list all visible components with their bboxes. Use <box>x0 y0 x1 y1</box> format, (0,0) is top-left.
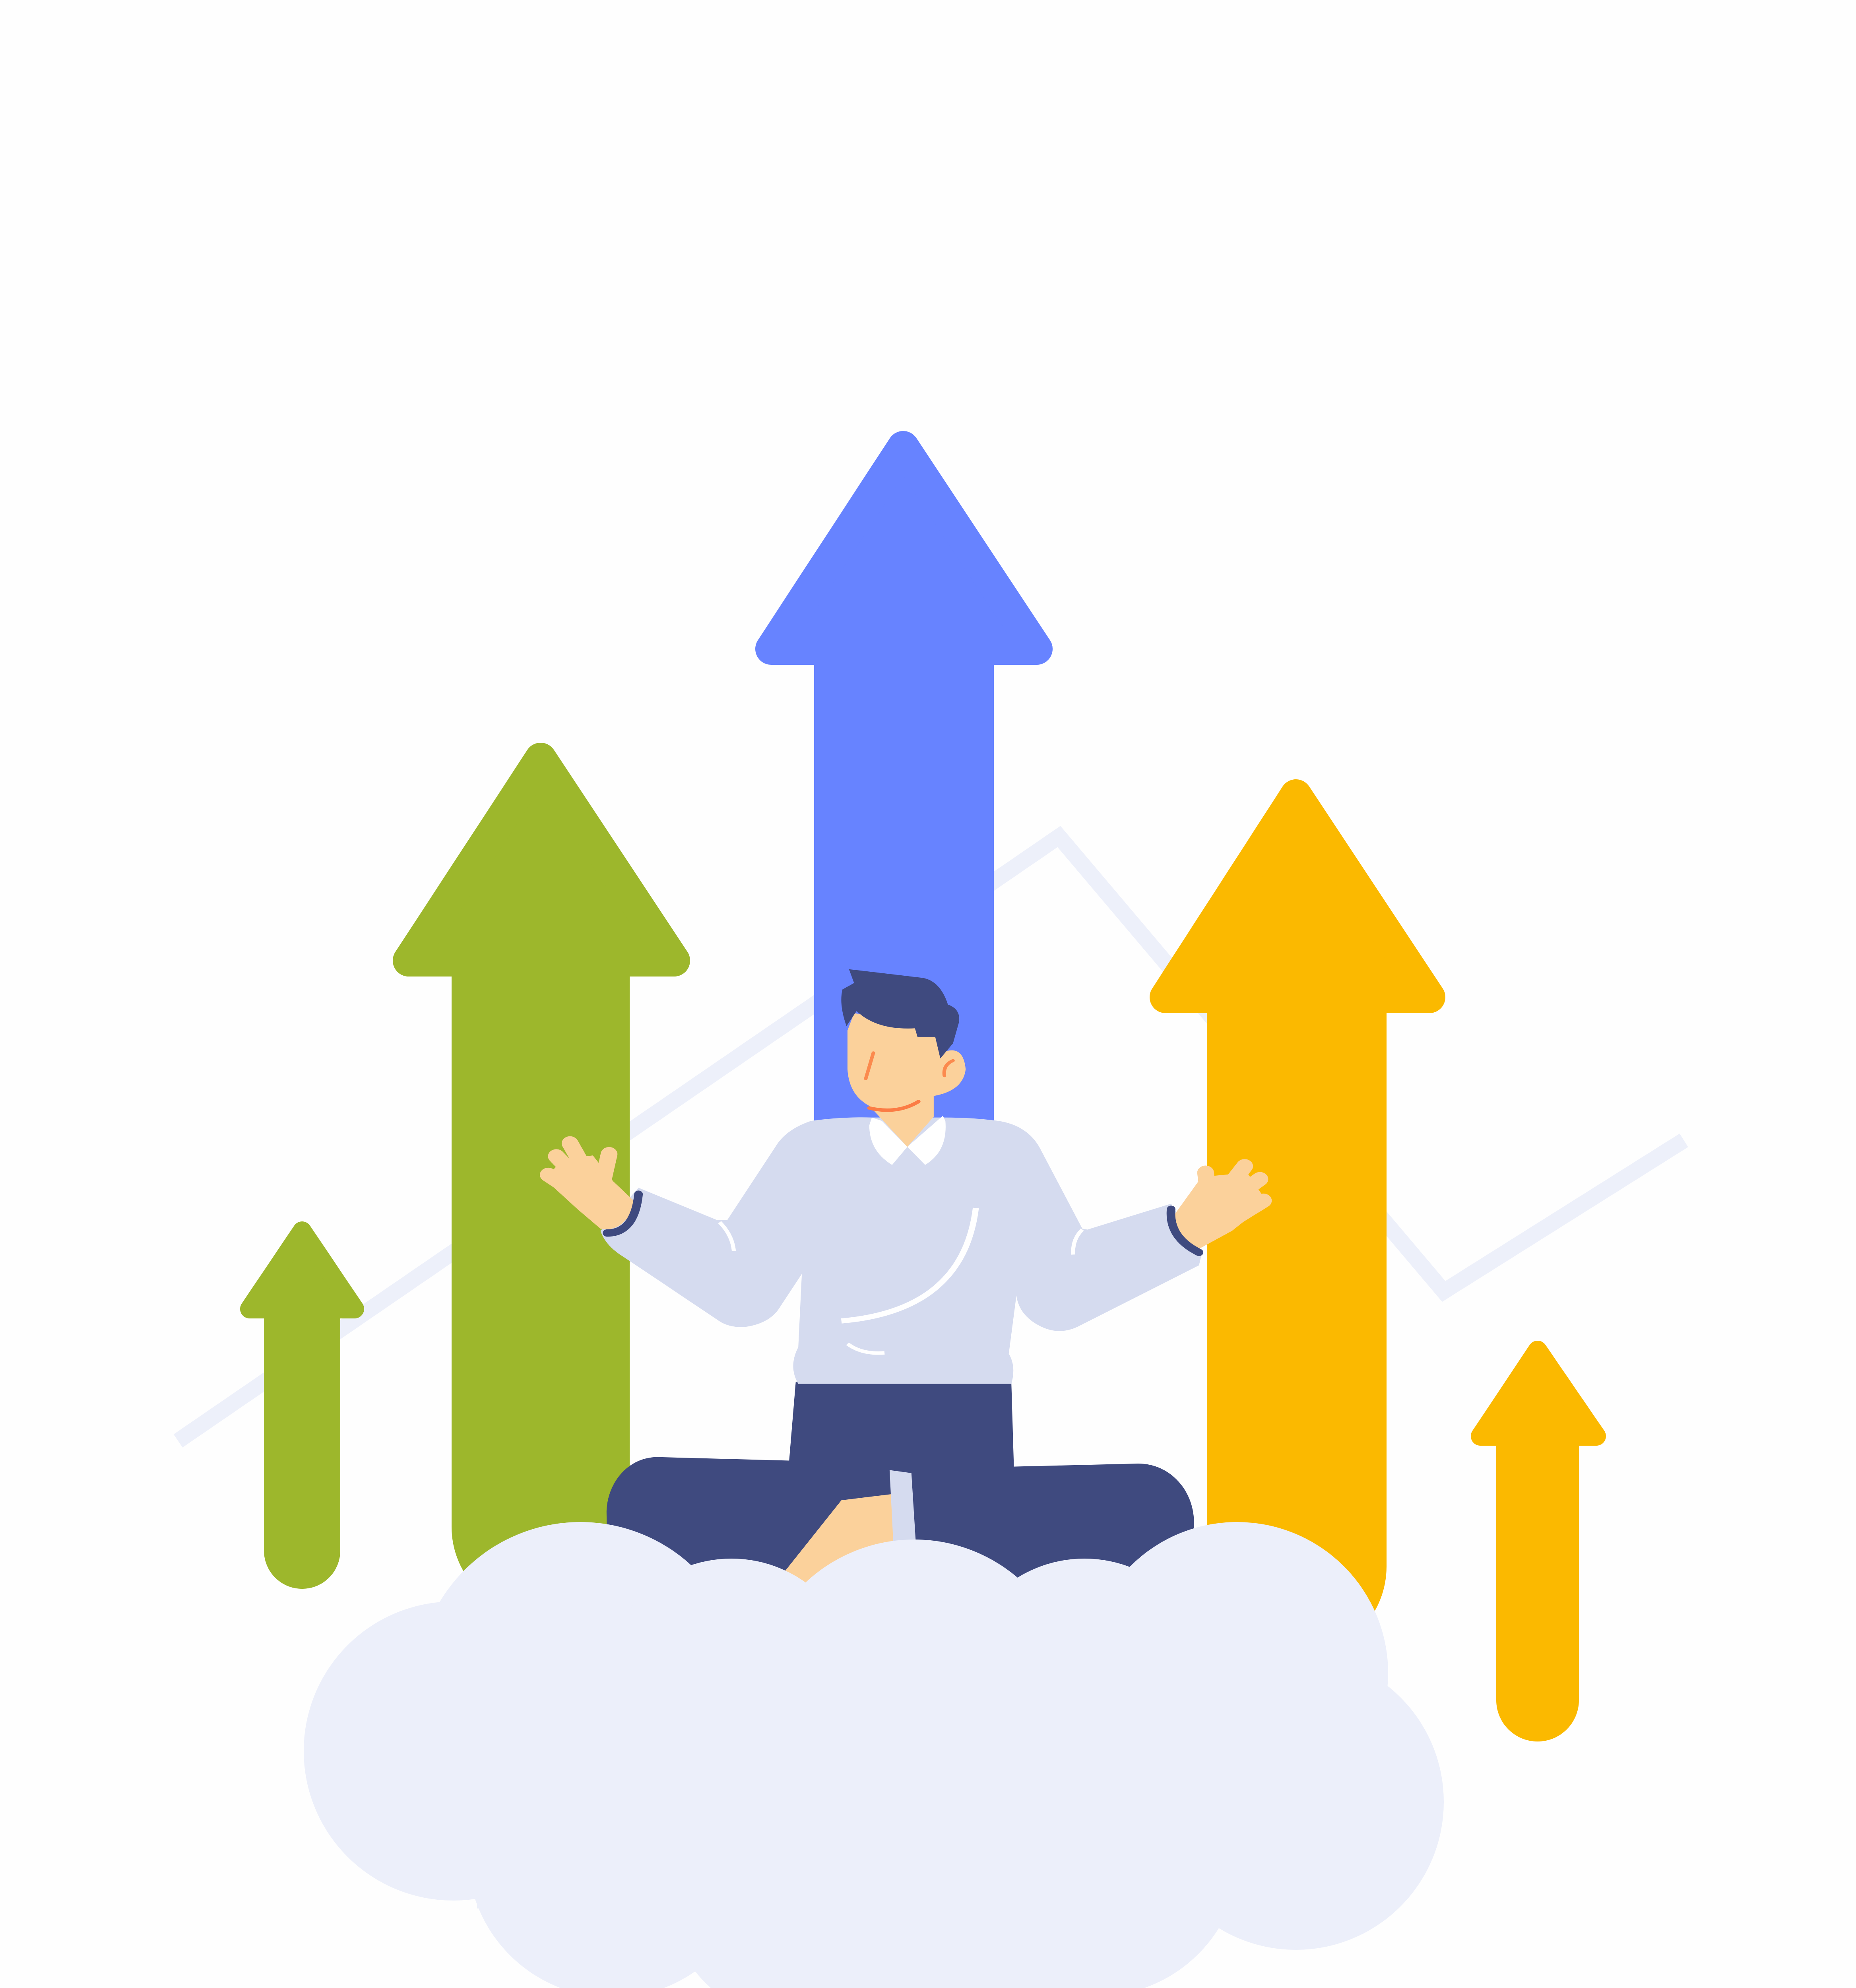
arrow: large yellow <box>1166 795 1429 1656</box>
trend line <box>178 837 1684 1441</box>
person: collar <box>869 1116 946 1165</box>
arrow: small green <box>250 1231 355 1589</box>
person meditating <box>545 969 1267 1612</box>
arrow: large blue <box>771 447 1037 1158</box>
person: cuffs <box>607 1194 1199 1252</box>
cloud <box>304 1522 1444 1988</box>
person: legs <box>607 1382 1194 1612</box>
person: hands <box>545 1143 1267 1250</box>
arrow: large green <box>409 759 674 1616</box>
arrow: small yellow <box>1480 1350 1596 1741</box>
person: head <box>841 969 966 1147</box>
person: sweater <box>601 1116 1202 1384</box>
